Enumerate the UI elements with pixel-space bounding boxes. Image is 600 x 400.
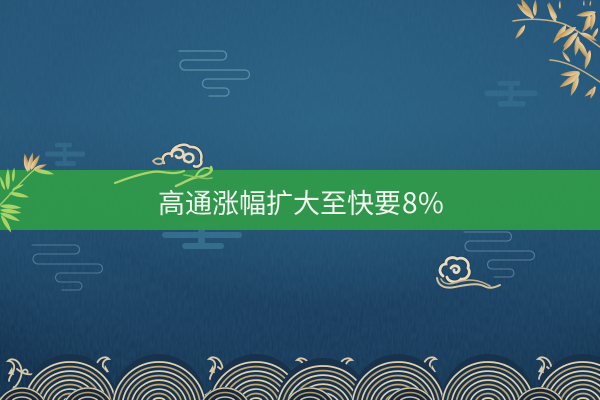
faint glyph: below banner [162,222,242,249]
bamboo: left edge [0,152,54,234]
cloud line: lower left [32,245,102,290]
faint glyph: left [45,143,85,166]
banner: green band [0,170,600,230]
headline text: 高通涨幅扩大至快要8% [158,182,444,222]
cloud tail over banner [115,167,212,186]
cloud: above banner [153,145,201,167]
cloud: lower right [437,258,500,288]
cloud line: lower right [464,232,534,277]
cloud line: top center [179,51,250,96]
faint glyph: upper right [485,81,537,107]
bamboo: top right [513,0,600,100]
waves: bottom border [0,354,600,400]
